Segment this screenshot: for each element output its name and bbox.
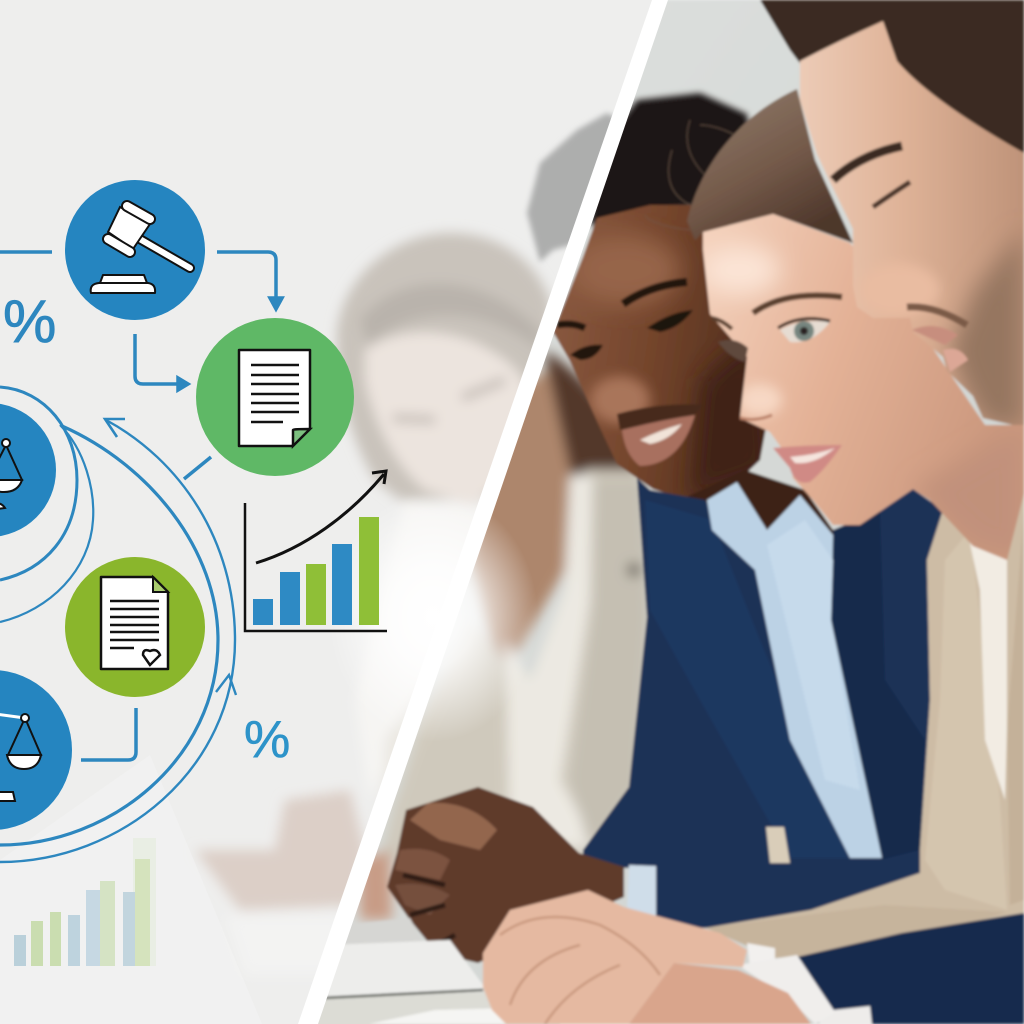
gavel handle — [138, 238, 190, 268]
gavel head — [108, 207, 150, 249]
connector: document to cycle — [184, 457, 211, 479]
blurred woman, right of divider — [360, 350, 650, 920]
woman — [645, 89, 1024, 958]
shirt — [969, 542, 1008, 799]
man's hand — [629, 963, 811, 1024]
icon: green certificate document circle — [65, 557, 205, 697]
hair — [590, 93, 760, 225]
beard shadow — [950, 230, 1024, 430]
arrow: gavel down to document — [135, 334, 188, 390]
connector: left line to gavel — [0, 250, 52, 254]
mustache and lips — [907, 307, 967, 325]
face and neck — [703, 214, 1024, 560]
arrow: gavel to document — [217, 252, 282, 309]
lens flare — [328, 492, 705, 742]
navy sleeve, cuffs and front hands — [483, 890, 1024, 1024]
gavel base — [91, 275, 155, 293]
icon: gavel circle — [65, 180, 205, 320]
hair — [687, 89, 853, 243]
faded laptop shape — [0, 755, 262, 1024]
dark clasped hands — [387, 787, 624, 963]
right photo panel — [300, 0, 1024, 1024]
icon: scales circle lower — [0, 670, 72, 830]
brow and eye — [833, 146, 902, 180]
navy blazer — [583, 478, 943, 928]
man 1 — [760, 0, 1024, 430]
icon: scales circle upper — [0, 403, 56, 537]
paper and table — [318, 916, 505, 1024]
faded bar chart bottom — [14, 838, 156, 966]
face — [800, 21, 1024, 425]
woman's hand — [483, 890, 747, 1024]
growth bar chart — [245, 471, 387, 631]
icon: green document circle — [196, 318, 354, 476]
diagonal white divider — [298, 0, 668, 1024]
cuff — [627, 865, 656, 918]
hair — [760, 0, 1024, 170]
percent sign lower right: % — [244, 711, 290, 769]
cycle arcs — [0, 387, 236, 862]
connector: certificate to scales — [81, 708, 136, 760]
percent sign top left: % — [3, 288, 56, 355]
faded blurred woman behind diagram — [195, 113, 620, 975]
neck — [688, 469, 836, 536]
mouth — [617, 404, 703, 430]
face — [553, 205, 780, 500]
man 2: dark skin — [553, 93, 780, 500]
photo background — [300, 0, 1024, 1024]
light blue shirt — [707, 482, 882, 858]
beige jacket — [720, 495, 1024, 926]
brow, eyes, lips — [753, 295, 842, 313]
brows and eyes — [623, 282, 687, 304]
wisps — [666, 119, 734, 229]
